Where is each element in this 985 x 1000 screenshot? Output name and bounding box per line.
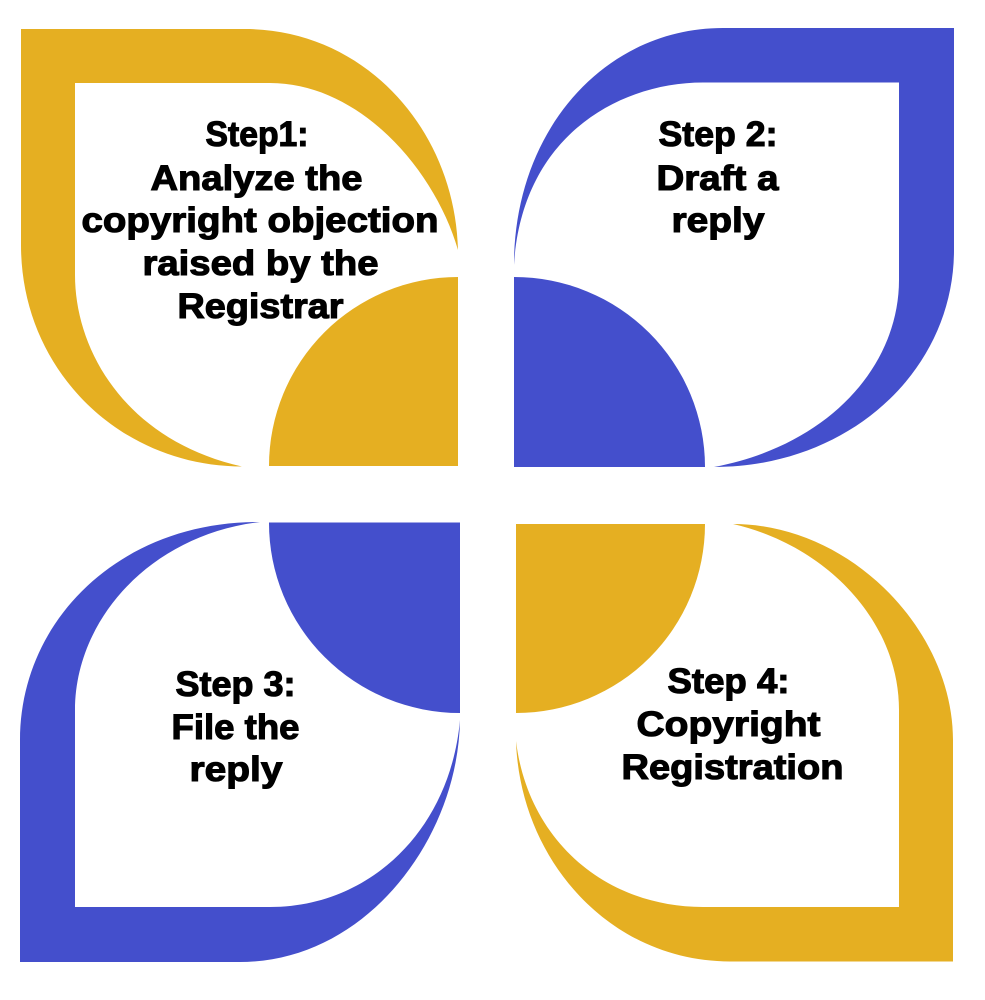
- text: step 4: [622, 662, 844, 787]
- panel: step 2: [514, 28, 954, 467]
- text: step 3: Step 3:: [176, 665, 296, 704]
- quarter circle: step 4: [516, 524, 705, 713]
- text: step 4: Copyright: [636, 705, 821, 744]
- text: step 1: raised by the: [142, 244, 378, 283]
- text: step 2: Step 2:: [658, 115, 778, 154]
- text: step 2: Draft a: [656, 159, 779, 198]
- quarter circle: step 3: [269, 522, 460, 713]
- panel: step 3: [20, 522, 460, 962]
- text: step 3: [172, 665, 300, 789]
- text: step 1: Registrar: [178, 287, 344, 326]
- quarter circle: step 2: [514, 277, 705, 467]
- text: step 4: Step 4:: [668, 662, 790, 701]
- frame: step 2 petal: [514, 28, 954, 467]
- text: step 4: Registration: [622, 748, 844, 787]
- text: step 1: Analyze the: [150, 159, 362, 198]
- frame: step 3 petal: [20, 522, 460, 962]
- text: step 1: [82, 115, 439, 326]
- panel: step 1: [21, 29, 458, 466]
- quarter circle: step 1: [269, 277, 458, 466]
- text: step 1: copyright objection: [82, 201, 439, 240]
- text: step 1: Step1:: [206, 115, 308, 154]
- text: step 3: File the: [172, 708, 300, 747]
- frame: step 4 petal: [516, 524, 953, 962]
- panel: step 4: [516, 524, 953, 962]
- text: step 2: [656, 115, 779, 240]
- text: step 2: reply: [672, 201, 765, 240]
- frame: step 1 petal: [21, 29, 458, 466]
- text: step 3: reply: [190, 750, 283, 789]
